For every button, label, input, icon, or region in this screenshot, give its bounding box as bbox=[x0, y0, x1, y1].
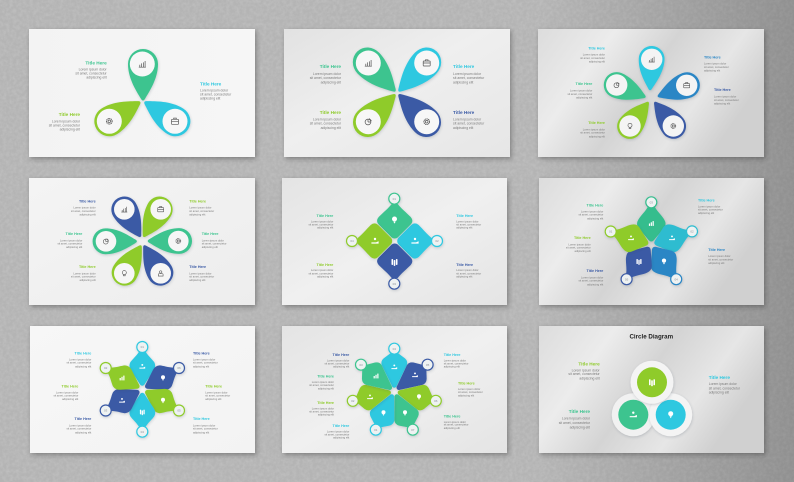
kite: green bbox=[377, 193, 412, 238]
text: top right: Title Here bbox=[453, 64, 475, 69]
text: green: Lorem ipsum dolor bbox=[562, 417, 591, 421]
text: lime title: adipiscing elit bbox=[60, 127, 80, 131]
text: top left: Title Here bbox=[79, 200, 96, 204]
kite: navy bbox=[617, 239, 661, 285]
petal: navy top left bbox=[107, 192, 152, 244]
text: upper right: Title Here bbox=[704, 56, 721, 60]
text: left upper: sit amet, consectetur bbox=[309, 383, 334, 387]
text: top left: adipiscing elit bbox=[80, 212, 96, 216]
text: right: sit amet, consectetur bbox=[708, 257, 733, 261]
panel 7: six-kite star bbox=[30, 326, 255, 453]
kite: navy bbox=[389, 357, 433, 399]
text: bottom right: adipiscing elit bbox=[189, 278, 206, 282]
petal: lime top right bbox=[132, 192, 177, 244]
kite: lime left bbox=[347, 379, 394, 413]
text: left: adipiscing elit bbox=[66, 245, 83, 249]
text: top left: Title Here bbox=[317, 214, 333, 218]
kite: cyan top bbox=[381, 343, 407, 388]
petal: lime bbox=[89, 89, 148, 142]
text: bottom left: adipiscing elit bbox=[317, 275, 334, 279]
text: green: Title Here bbox=[569, 409, 590, 414]
petal: cyan bbox=[136, 89, 196, 142]
text: lime title: sit amet, consectetur bbox=[49, 123, 81, 127]
text: upper right: adipiscing elit bbox=[444, 364, 460, 368]
text: lower left: adipiscing elit bbox=[75, 430, 92, 434]
text: left: adipiscing elit bbox=[575, 249, 591, 253]
text: bottom right: Lorem ipsum dolor bbox=[189, 271, 212, 275]
kite: green: 03 bbox=[650, 200, 653, 204]
text: top left: Lorem ipsum dolor bbox=[311, 219, 333, 223]
text: left: adipiscing elit bbox=[576, 95, 593, 99]
text: bottom left: Lorem ipsum dolor bbox=[313, 118, 342, 122]
text: upper right: Title Here bbox=[444, 353, 460, 357]
text: top left: Title Here bbox=[587, 204, 603, 208]
text: left: Title Here bbox=[62, 384, 78, 388]
text: left: Lorem ipsum dolor bbox=[56, 390, 78, 394]
text: upper left: sit amet, consectetur bbox=[67, 361, 91, 365]
text: green title: Lorem ipsum dolor bbox=[79, 68, 108, 72]
petal: green right bbox=[148, 228, 192, 254]
text: upper right: Title Here bbox=[193, 352, 210, 356]
text: bottom left: sit amet, consectetur bbox=[310, 122, 342, 126]
text: bottom left: adipiscing elit bbox=[589, 134, 605, 138]
text: right: sit amet, consectetur bbox=[205, 394, 230, 398]
text: cyan: Title Here bbox=[709, 375, 730, 380]
text: left lower: sit amet, consectetur bbox=[309, 409, 334, 413]
petal: green bbox=[600, 68, 651, 109]
text: top left: sit amet, consectetur bbox=[579, 213, 603, 217]
text: green title: adipiscing elit bbox=[86, 76, 107, 80]
kite: navy lower left bbox=[100, 380, 146, 420]
kite: lime upper left bbox=[100, 359, 146, 399]
text: bottom left: Title Here bbox=[587, 269, 603, 273]
petal: green left bbox=[93, 228, 137, 254]
kite: blue bbox=[642, 239, 686, 285]
text: upper left: Lorem ipsum dolor bbox=[69, 357, 91, 361]
kite: navy: 05 bbox=[625, 277, 629, 281]
text: bottom left: Lorem ipsum dolor bbox=[311, 268, 333, 272]
kite: cyan top: 01 bbox=[141, 345, 144, 349]
text: upper right: adipiscing elit bbox=[704, 68, 720, 72]
text: lime title: Title Here bbox=[59, 112, 80, 117]
text: lower left: Lorem ipsum dolor bbox=[69, 423, 91, 427]
text: left lower: Lorem ipsum dolor bbox=[312, 406, 334, 410]
text: bottom right: Title Here bbox=[189, 265, 206, 269]
text: upper left: adipiscing elit bbox=[333, 364, 350, 368]
text: upper left: sit amet, consectetur bbox=[325, 361, 349, 365]
text: right: adipiscing elit bbox=[708, 261, 725, 265]
panel 2: four-petal diagram bbox=[284, 29, 510, 157]
text: lime: Title Here bbox=[578, 362, 600, 366]
text: right: Lorem ipsum dolor bbox=[205, 390, 228, 394]
text: right: sit amet, consectetur bbox=[202, 242, 227, 246]
text: bottom left: sit amet, consectetur bbox=[579, 279, 603, 283]
text: top right: sit amet, consectetur bbox=[698, 208, 723, 212]
text: top left: Lorem ipsum dolor bbox=[73, 206, 96, 210]
text: cyan title: Lorem ipsum dolor bbox=[200, 89, 229, 93]
petal: lime bbox=[347, 84, 406, 143]
text: top left: sit amet, consectetur bbox=[310, 76, 342, 80]
petal: green bbox=[128, 49, 158, 100]
kite: cyan lower left: 01 bbox=[374, 428, 378, 432]
text: top right: Title Here bbox=[698, 198, 715, 202]
panel 5: four-kite diamond bbox=[282, 178, 507, 305]
text: bottom left: sit amet, consectetur bbox=[71, 275, 96, 279]
text: top left: adipiscing elit bbox=[321, 80, 341, 84]
kite: cyan bbox=[397, 223, 442, 259]
kite: teal: 02 bbox=[690, 230, 694, 234]
text: cyan: adipiscing elit bbox=[709, 391, 729, 395]
text: top: Title Here bbox=[588, 46, 605, 50]
petal: lime bbox=[612, 94, 658, 144]
text: cyan title: sit amet, consectetur bbox=[200, 93, 232, 97]
petal: cyan bbox=[388, 41, 448, 102]
text: top: adipiscing elit bbox=[589, 60, 605, 64]
kite: lime upper left: 02 bbox=[104, 366, 108, 370]
text: top: Lorem ipsum dolor bbox=[583, 53, 605, 57]
petal: navy bottom right bbox=[133, 239, 178, 290]
text: right: Title Here bbox=[708, 248, 725, 252]
text: lower right: Title Here bbox=[714, 88, 731, 92]
text: cyan: sit amet, consectetur bbox=[709, 386, 741, 390]
text: bottom right: Lorem ipsum dolor bbox=[453, 118, 482, 122]
text: lower right: Title Here bbox=[444, 414, 460, 418]
kite: navy: 03 bbox=[393, 282, 396, 286]
text: upper right: sit amet, consectetur bbox=[444, 361, 469, 365]
text: left upper: Lorem ipsum dolor bbox=[312, 380, 334, 384]
circle: lime bbox=[630, 361, 674, 404]
text: left upper: adipiscing elit bbox=[318, 386, 334, 390]
kite: teal bbox=[650, 219, 698, 257]
kite: navy bbox=[377, 244, 412, 289]
kite: cyan lower left bbox=[366, 389, 404, 435]
text: cyan title: Title Here bbox=[200, 82, 222, 86]
text: top right: Lorem ipsum dolor bbox=[453, 72, 482, 76]
text: bottom left: Title Here bbox=[317, 263, 333, 267]
text: cyan: Lorem ipsum dolor bbox=[709, 382, 738, 386]
text: upper right: Lorem ipsum dolor bbox=[193, 357, 215, 361]
text: left: Lorem ipsum dolor bbox=[570, 88, 592, 92]
text: lower right: adipiscing elit bbox=[193, 430, 209, 434]
text: right: Title Here bbox=[205, 384, 222, 388]
text: left lower: Title Here bbox=[317, 401, 334, 405]
kite: lime right: 06 bbox=[434, 399, 438, 403]
petal: cyan bbox=[637, 45, 665, 91]
text: left: Title Here bbox=[576, 82, 592, 86]
text: left: sit amet, consectetur bbox=[58, 242, 82, 246]
kite: navy upper right: 06 bbox=[177, 366, 181, 370]
text: bottom left: Title Here bbox=[588, 121, 605, 125]
text: bottom left: sit amet, consectetur bbox=[309, 272, 333, 276]
text: upper right: sit amet, consectetur bbox=[704, 65, 729, 69]
text: top right: adipiscing elit bbox=[453, 80, 473, 84]
heading: Circle Diagram bbox=[629, 333, 674, 340]
kite: cyan bottom bbox=[129, 393, 155, 437]
kite: cyan top bbox=[129, 342, 155, 386]
kite: green: 01 bbox=[393, 197, 396, 201]
kite: lime right bbox=[395, 379, 441, 413]
text: lower right: Title Here bbox=[193, 417, 210, 421]
panel 8: seven-kite star bbox=[282, 326, 507, 453]
text: lower right: adipiscing elit bbox=[714, 101, 730, 105]
text: bottom right: sit amet, consectetur bbox=[189, 275, 214, 279]
petal: navy bbox=[645, 94, 691, 144]
text: upper left: Lorem ipsum dolor bbox=[327, 358, 349, 362]
kite: navy lower left: 03 bbox=[104, 409, 108, 413]
text: top left: Lorem ipsum dolor bbox=[313, 72, 342, 76]
text: bottom left: Lorem ipsum dolor bbox=[581, 275, 603, 279]
text: upper left: Title Here bbox=[75, 352, 91, 356]
text: bottom right: Title Here bbox=[456, 263, 473, 267]
kite: lime lower right bbox=[139, 380, 184, 420]
text: top right: adipiscing elit bbox=[698, 211, 714, 215]
text: lower right: sit amet, consectetur bbox=[444, 423, 469, 427]
petal: blue bbox=[653, 69, 704, 109]
text: lower left: sit amet, consectetur bbox=[325, 432, 349, 436]
text: lower left: sit amet, consectetur bbox=[67, 427, 91, 431]
kite: lime lower right: 05 bbox=[177, 409, 181, 413]
text: top right: Lorem ipsum dolor bbox=[189, 206, 212, 210]
text: left: Lorem ipsum dolor bbox=[568, 242, 591, 246]
text: top left: sit amet, consectetur bbox=[309, 222, 333, 226]
text: upper left: adipiscing elit bbox=[75, 364, 92, 368]
petal: navy bbox=[388, 84, 447, 143]
text: bottom left: Title Here bbox=[79, 265, 96, 269]
text: top right: sit amet, consectetur bbox=[189, 209, 214, 213]
kite: green lower right: 07 bbox=[411, 428, 415, 432]
text: cyan title: adipiscing elit bbox=[200, 97, 220, 101]
text: top right: Lorem ipsum dolor bbox=[698, 204, 720, 208]
text: left: Title Here bbox=[574, 236, 591, 240]
text: left upper: Title Here bbox=[317, 374, 334, 378]
kite: navy: 05 bbox=[426, 363, 430, 367]
text: left: sit amet, consectetur bbox=[568, 92, 592, 96]
kite: lime bbox=[605, 219, 653, 257]
text: right: Title Here bbox=[202, 232, 218, 236]
text: right: adipiscing elit bbox=[202, 245, 218, 249]
kite: lime: 01 bbox=[609, 230, 613, 234]
text: lower left: Title Here bbox=[75, 417, 91, 421]
text: right: Lorem ipsum dolor bbox=[202, 238, 224, 242]
text: lower left: Title Here bbox=[333, 424, 349, 428]
text: left lower: adipiscing elit bbox=[318, 413, 334, 417]
text: bottom left: adipiscing elit bbox=[587, 282, 604, 286]
text: lime: Lorem ipsum dolor bbox=[572, 368, 601, 372]
kite: cyan: 02 bbox=[435, 239, 439, 243]
kite: cyan top: 04 bbox=[393, 347, 396, 351]
text: top: sit amet, consectetur bbox=[580, 56, 605, 60]
text: bottom left: Lorem ipsum dolor bbox=[583, 127, 605, 131]
text: lower right: Lorem ipsum dolor bbox=[444, 420, 466, 424]
text: top right: adipiscing elit bbox=[189, 212, 206, 216]
text: bottom left: adipiscing elit bbox=[80, 278, 96, 282]
text: upper left: Title Here bbox=[333, 353, 349, 357]
text: bottom right: adipiscing elit bbox=[456, 275, 473, 279]
text: right: adipiscing elit bbox=[458, 393, 474, 397]
text: upper right: Lorem ipsum dolor bbox=[704, 62, 726, 66]
text: lower left: adipiscing elit bbox=[333, 435, 350, 439]
text: lower right: adipiscing elit bbox=[444, 426, 460, 430]
panel 4: six-petal diagram bbox=[29, 178, 255, 305]
kite: navy upper right bbox=[139, 359, 184, 399]
petal: lime bottom left bbox=[107, 239, 152, 290]
text: bottom left: Lorem ipsum dolor bbox=[73, 271, 96, 275]
text: right: adipiscing elit bbox=[205, 397, 222, 401]
text: bottom right: sit amet, consectetur bbox=[456, 272, 481, 276]
text: top left: adipiscing elit bbox=[317, 225, 334, 229]
panel 9: circle diagram bbox=[539, 326, 764, 453]
text: upper right: Lorem ipsum dolor bbox=[444, 358, 466, 362]
text: top right: Title Here bbox=[456, 214, 473, 218]
text: top left: Lorem ipsum dolor bbox=[581, 209, 603, 213]
kite: green upper left: 03 bbox=[359, 363, 363, 367]
text: left: Title Here bbox=[66, 232, 82, 236]
text: upper right: adipiscing elit bbox=[193, 364, 209, 368]
panel 1: three-petal diagram bbox=[29, 29, 255, 157]
text: lime: adipiscing elit bbox=[579, 377, 600, 381]
text: lime title: Lorem ipsum dolor bbox=[52, 119, 81, 123]
text: top right: Lorem ipsum dolor bbox=[456, 219, 479, 223]
text: bottom right: Lorem ipsum dolor bbox=[456, 268, 479, 272]
text: top left: adipiscing elit bbox=[587, 216, 604, 220]
kite: lime: 04 bbox=[350, 239, 354, 243]
text: top left: sit amet, consectetur bbox=[71, 209, 96, 213]
text: left: sit amet, consectetur bbox=[566, 246, 591, 250]
text: lower left: Lorem ipsum dolor bbox=[327, 430, 349, 434]
text: left: Lorem ipsum dolor bbox=[60, 238, 82, 242]
petal: green bbox=[346, 41, 406, 102]
kite: cyan bottom: 04 bbox=[141, 430, 144, 434]
circle: cyan bbox=[649, 393, 692, 436]
text: bottom right: Title Here bbox=[453, 110, 475, 115]
text: lime: sit amet, consectetur bbox=[568, 372, 601, 376]
text: lower right: sit amet, consectetur bbox=[193, 427, 218, 431]
text: left: sit amet, consectetur bbox=[54, 394, 78, 398]
text: right: sit amet, consectetur bbox=[458, 390, 483, 394]
text: green title: sit amet, consectetur bbox=[75, 72, 108, 76]
text: bottom left: adipiscing elit bbox=[321, 126, 341, 130]
text: lower right: Lorem ipsum dolor bbox=[714, 94, 736, 98]
text: green: sit amet, consectetur bbox=[559, 421, 591, 425]
kite: lime bbox=[346, 223, 392, 259]
kite: green bbox=[637, 197, 666, 241]
panel 3: five-petal diagram bbox=[538, 29, 764, 157]
circle: green bbox=[612, 393, 655, 436]
text: right: Lorem ipsum dolor bbox=[708, 254, 731, 258]
kite: green upper left bbox=[356, 357, 400, 399]
text: lower right: sit amet, consectetur bbox=[714, 98, 739, 102]
text: top right: sit amet, consectetur bbox=[453, 76, 485, 80]
kite: green lower right bbox=[384, 389, 423, 435]
text: green: adipiscing elit bbox=[570, 425, 590, 429]
text: top right: Title Here bbox=[189, 200, 206, 204]
text: bottom right: adipiscing elit bbox=[453, 126, 473, 130]
text: bottom left: Title Here bbox=[320, 110, 341, 115]
text: left: adipiscing elit bbox=[62, 397, 79, 401]
text: right: Title Here bbox=[458, 382, 475, 386]
text: top right: sit amet, consectetur bbox=[456, 222, 481, 226]
text: bottom right: sit amet, consectetur bbox=[453, 122, 485, 126]
kite: blue: 04 bbox=[675, 277, 678, 281]
kite: lime left: 02 bbox=[351, 399, 355, 403]
text: right: Lorem ipsum dolor bbox=[458, 387, 480, 391]
text: bottom left: sit amet, consectetur bbox=[580, 131, 605, 135]
panel 6: five-kite star bbox=[539, 178, 764, 305]
text: top right: adipiscing elit bbox=[456, 225, 473, 229]
text: lower right: Lorem ipsum dolor bbox=[193, 423, 215, 427]
text: upper right: sit amet, consectetur bbox=[193, 361, 218, 365]
text: top left: Title Here bbox=[320, 64, 341, 69]
text: green title: Title Here bbox=[85, 60, 107, 66]
